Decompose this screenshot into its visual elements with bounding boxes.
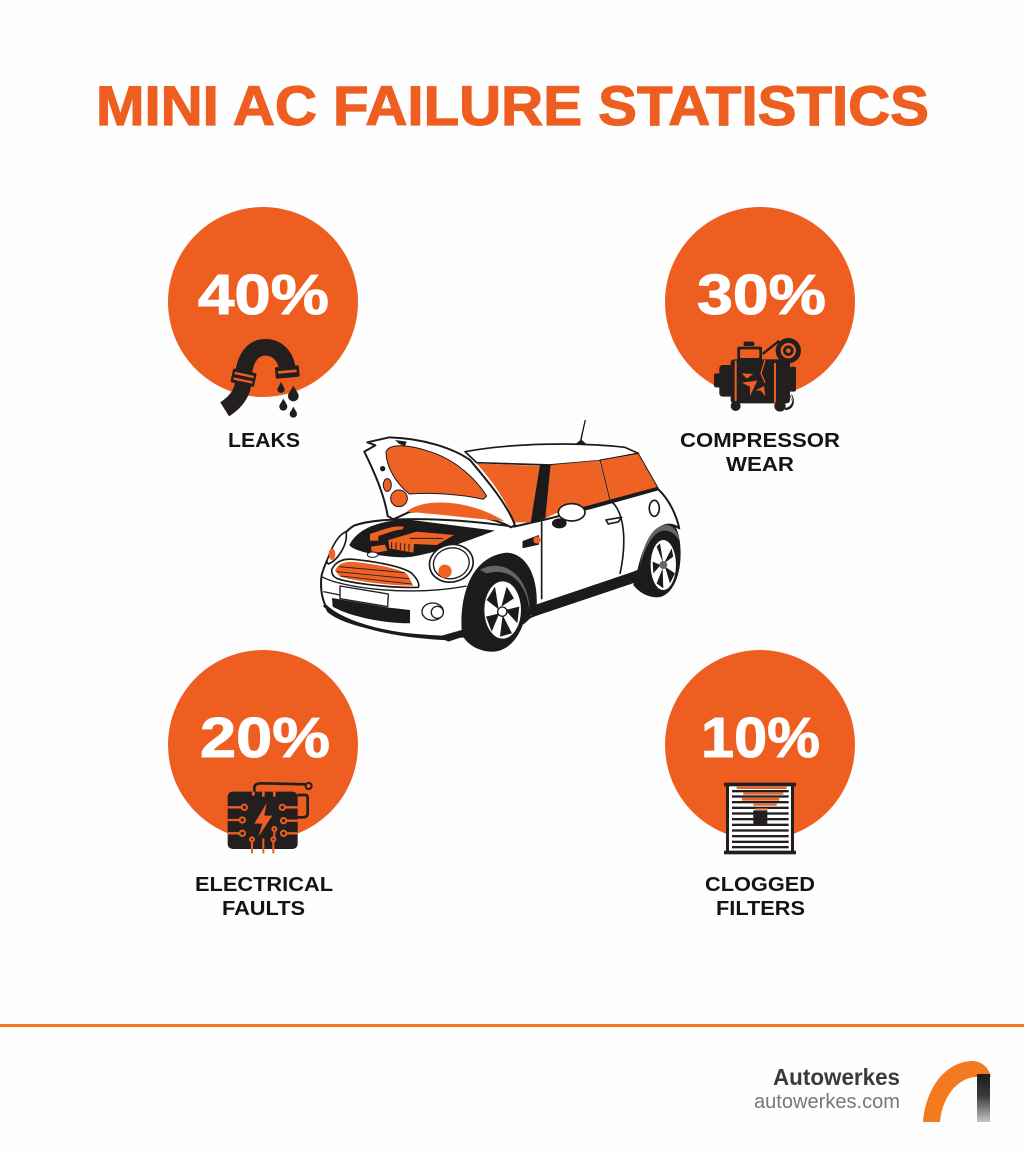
fog light (422, 603, 443, 620)
label: compressor wear (680, 429, 840, 476)
circle: filters (665, 650, 855, 840)
circle: electrical (168, 650, 358, 840)
brand name: Autowerkes (773, 1064, 900, 1090)
label: clogged filters: FILTERS (716, 897, 805, 920)
logo: arch (923, 1061, 991, 1122)
engine bay (349, 519, 495, 557)
icon: circuit board (228, 783, 312, 853)
label: leaks: LEAKS (228, 429, 300, 452)
label: electrical faults: FAULTS (222, 897, 305, 920)
right headlight (426, 540, 477, 586)
label: clogged filters (705, 873, 815, 920)
rear wheel (633, 518, 681, 597)
bonnet badge (367, 552, 378, 557)
door lines and handle (523, 500, 659, 599)
lower bumper intake (332, 598, 410, 623)
stat: electrical faults 20% (168, 650, 358, 920)
number plate (340, 586, 388, 607)
left headlight (327, 532, 346, 564)
label: compressor wear: WEAR (726, 453, 794, 476)
windows (477, 453, 658, 523)
label: electrical faults: ELECTRICAL (195, 873, 333, 896)
value: 10%: 10% (701, 706, 820, 770)
icon: clogged filter (724, 783, 796, 854)
icon: cracked compressor (714, 338, 801, 412)
circle: leaks (168, 207, 358, 397)
circle: compressor (665, 207, 855, 397)
label: clogged filters: CLOGGED (705, 873, 815, 896)
bumper bottom edge (324, 605, 447, 639)
front wheel (438, 553, 537, 652)
antenna (577, 420, 585, 444)
brand url: autowerkes.com (754, 1091, 900, 1113)
side mirror (552, 504, 585, 528)
roof (465, 444, 638, 465)
label: electrical faults (195, 873, 333, 920)
grille (332, 559, 419, 587)
bumper line (322, 577, 467, 595)
value: 40%: 40% (198, 263, 329, 327)
icon: leaking hose (225, 347, 300, 418)
footer divider (0, 1024, 1024, 1027)
label: compressor wear: COMPRESSOR (680, 429, 840, 452)
stat: compressor wear 30% (665, 207, 855, 476)
value: 30%: 30% (697, 263, 826, 327)
stat: leaks 40% (168, 207, 358, 452)
rear arch band (640, 525, 680, 567)
stat: clogged filters 10% (665, 650, 855, 920)
car body (321, 489, 679, 637)
illustration: Mini car with open hood (321, 420, 681, 652)
title: MINI AC FAILURE STATISTICS (96, 74, 929, 137)
sill (530, 570, 638, 617)
value: 20%: 20% (200, 706, 330, 770)
open hood (364, 437, 515, 527)
